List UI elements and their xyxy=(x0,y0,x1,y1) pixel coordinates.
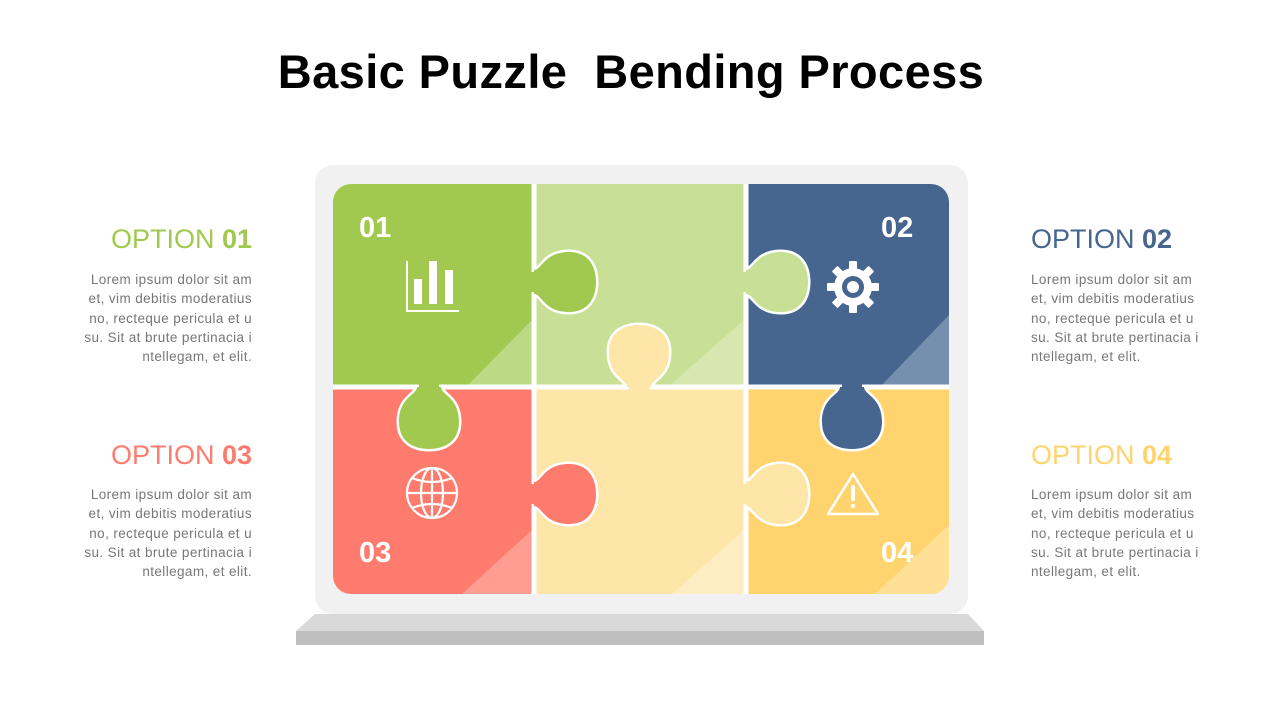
numbers: 04 xyxy=(881,537,913,569)
icon: globe xyxy=(407,468,457,518)
option 01 text: Lorem ipsum dolor sit am xyxy=(91,272,252,287)
shadows xyxy=(468,320,532,384)
option 03 text: ntellegam, et elit. xyxy=(142,564,252,579)
option 03 text: Lorem ipsum dolor sit am xyxy=(91,487,252,502)
option 01 text: no, recteque pericula et u xyxy=(89,311,252,326)
numbers: 03 xyxy=(359,537,391,569)
icon: warning xyxy=(828,474,878,514)
numbers: 01 xyxy=(359,212,391,244)
base stand xyxy=(296,614,984,645)
option 02 text: no, recteque pericula et u xyxy=(1031,311,1194,326)
icon: bar chart xyxy=(406,261,459,312)
numbers: 02 xyxy=(881,212,913,244)
numbers xyxy=(359,212,913,569)
option 04 text: ntellegam, et elit. xyxy=(1031,564,1141,579)
separators xyxy=(333,184,949,594)
option 02 text xyxy=(1031,272,1199,364)
option 02 text: su. Sit at brute pertinacia i xyxy=(1031,330,1199,345)
option 04 text: et, vim debitis moderatius xyxy=(1031,506,1194,521)
icon: gear xyxy=(827,261,879,313)
option 02 text: Lorem ipsum dolor sit am xyxy=(1031,272,1192,287)
option 02 heading: OPTION 02 xyxy=(1031,224,1172,254)
option 04 heading: OPTION 04 xyxy=(1031,440,1172,470)
tab outlines xyxy=(399,252,882,524)
option 03 heading: OPTION 03 xyxy=(111,440,252,470)
option 01 text xyxy=(84,272,252,364)
option 01 text: et, vim debitis moderatius xyxy=(89,291,252,306)
option 04 text xyxy=(1031,487,1199,579)
option 04 text: no, recteque pericula et u xyxy=(1031,526,1194,541)
option 03 text xyxy=(84,487,252,579)
option 03 text: no, recteque pericula et u xyxy=(89,526,252,541)
option 01 text: ntellegam, et elit. xyxy=(142,349,252,364)
option 02 text: et, vim debitis moderatius xyxy=(1031,291,1194,306)
option 04 text: Lorem ipsum dolor sit am xyxy=(1031,487,1192,502)
option 03 text: su. Sit at brute pertinacia i xyxy=(84,545,252,560)
option 02 text: ntellegam, et elit. xyxy=(1031,349,1141,364)
tab fills xyxy=(399,252,882,524)
option 03 text: et, vim debitis moderatius xyxy=(89,506,252,521)
option 01 heading: OPTION 01 xyxy=(111,224,252,254)
tab neck patches xyxy=(419,272,862,504)
puzzle device xyxy=(296,165,984,645)
frame xyxy=(315,165,968,614)
puzzle grid xyxy=(333,184,949,594)
option 01 text: su. Sit at brute pertinacia i xyxy=(84,330,252,345)
option 04 text: su. Sit at brute pertinacia i xyxy=(1031,545,1199,560)
title: Basic Puzzle Bending Process xyxy=(278,45,984,98)
